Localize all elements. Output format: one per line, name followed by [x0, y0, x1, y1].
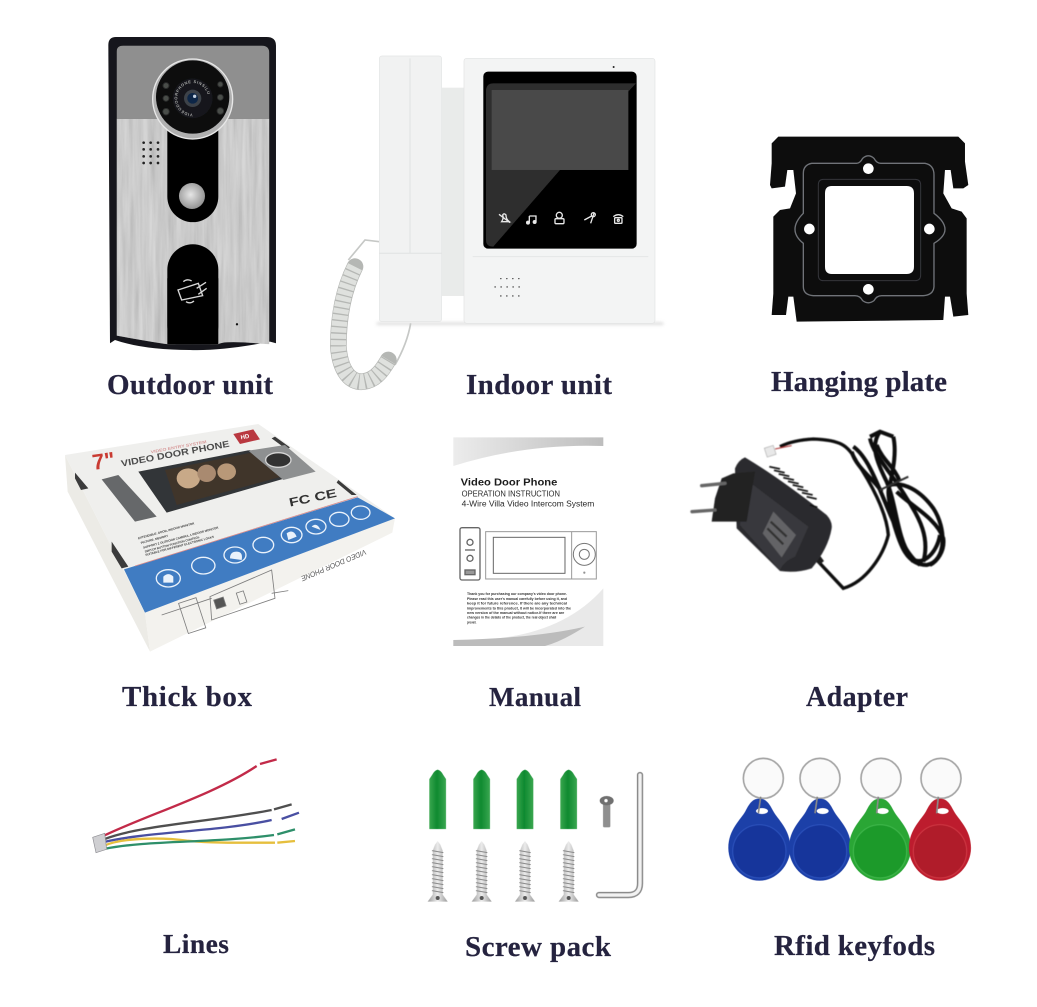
outdoor unit housing — [108, 37, 276, 350]
screen — [492, 90, 628, 170]
box top — [65, 424, 395, 613]
certification marks: FC CE — [288, 486, 338, 510]
label: adapter: Adapter — [806, 682, 908, 713]
box front — [145, 518, 395, 652]
blue fob 2 — [789, 799, 851, 881]
red wire tip — [775, 446, 792, 449]
infrared LEDs — [163, 82, 224, 115]
camera lens: VIDEODOORPHONE SINSILU — [174, 80, 210, 116]
manual system name: 4-Wire Villa Video Intercom System — [462, 499, 595, 508]
blue wire — [104, 813, 299, 842]
microphone dot — [613, 66, 615, 68]
HD badge — [233, 429, 260, 444]
panel: screw pack — [428, 770, 640, 902]
panel: hanging plate — [770, 137, 968, 322]
yellow wire — [104, 839, 295, 846]
handset — [379, 56, 442, 322]
adapter body — [735, 457, 832, 572]
feature list: SUPPORT 2 OUTDOOR CAMERA, 1 INDOOR MONITOR — [143, 525, 220, 550]
box title: VIDEO DOOR PHONE — [120, 439, 230, 469]
plug pins — [692, 483, 725, 512]
feature list: PICTURE: MEMORY — [140, 534, 169, 545]
panel: indoor unit — [338, 56, 663, 382]
icon: person — [555, 212, 564, 224]
inner ridge — [818, 179, 921, 281]
panel: adapter — [692, 432, 944, 588]
glass front — [483, 72, 637, 249]
cable tie — [880, 477, 908, 490]
green wire — [104, 829, 295, 849]
plug housing — [712, 472, 755, 522]
box left side — [65, 455, 150, 652]
green fob — [849, 799, 911, 881]
label: outdoor unit: Outdoor unit — [107, 369, 273, 401]
label: manual: Manual — [489, 682, 581, 712]
feature list — [138, 521, 220, 557]
upside-down product name: VIDEO DOOR PHONE — [300, 547, 368, 583]
icon: key — [584, 213, 595, 223]
monitor body — [464, 58, 655, 323]
manual body text: Please read this user's manual carefully before using it, and — [467, 597, 567, 601]
size mark: 7" — [91, 447, 116, 475]
wall anchors — [429, 770, 577, 829]
panel: manual — [453, 437, 603, 646]
top swoosh — [453, 437, 603, 466]
monitor side panel — [248, 445, 316, 480]
label: indoor unit: Indoor unit — [466, 369, 612, 401]
speaker holes — [142, 141, 159, 164]
connector — [93, 833, 107, 853]
key rings — [743, 758, 961, 798]
label: hanging plate: Hanging plate — [771, 366, 947, 398]
brushed metal faceplate — [113, 43, 273, 352]
touch icons — [499, 212, 623, 224]
lower panel seam — [473, 255, 648, 258]
icon: music — [527, 216, 536, 224]
strain relief — [804, 544, 824, 565]
feature list: EXTENDIBLE: DOOR, INDOOR MONITOR — [138, 521, 196, 540]
family photo — [165, 453, 282, 505]
call button — [179, 183, 205, 209]
manual body text: changes in the details of the product, the real object shall — [467, 616, 556, 620]
feature list: SWITCH BUTTON FUNCTION CONTROL — [144, 535, 200, 554]
glass reflection — [486, 83, 636, 247]
cable bundle — [852, 432, 944, 565]
panel: rfid keyfobs — [728, 758, 971, 881]
label: rfid keyfods: Rfid keyfods — [774, 930, 935, 962]
hex key — [599, 775, 640, 895]
camera ring — [153, 59, 233, 139]
long screws — [428, 841, 579, 902]
vents — [769, 467, 817, 507]
bottom swoosh — [453, 588, 603, 646]
wiring diagram — [162, 570, 288, 633]
adapter lit face — [740, 480, 808, 570]
manual body text: keep it for future reference. If there are any technical — [467, 602, 567, 606]
icon: mute bell — [499, 214, 510, 223]
icon: phone — [613, 215, 623, 223]
manual body text — [467, 592, 571, 624]
bottom band — [453, 627, 585, 646]
feature icons — [156, 506, 370, 587]
manual subtitle: OPERATION INSTRUCTION — [462, 489, 560, 498]
manual title: Video Door Phone — [461, 478, 558, 489]
red fob — [909, 799, 971, 881]
panel: thick box — [65, 424, 395, 652]
label: screw pack: Screw pack — [465, 931, 612, 963]
manual body text: new version of the manual without notice.If there are are — [467, 611, 564, 615]
handset cord — [338, 240, 411, 382]
plate silhouette — [770, 137, 968, 322]
manual body text: Thank you for purchasing our company's video door phone. — [467, 592, 567, 596]
manual page — [453, 437, 603, 646]
card reader icon — [178, 280, 207, 303]
speaker holes — [495, 279, 525, 296]
ring clips — [758, 797, 938, 813]
box subtitle: VIDEO ENTRY SYSTEM — [150, 439, 208, 454]
call button strip — [167, 125, 218, 222]
blue fob 1 — [728, 799, 790, 881]
outdoor unit picture — [102, 475, 157, 522]
status dot — [236, 323, 238, 325]
feature list: SUITABLE FOR DIFFERENT ELECTRONIC LOCKS — [145, 535, 214, 557]
red wire — [103, 759, 277, 836]
floor shadow — [377, 323, 663, 325]
monitor diagram — [486, 532, 596, 579]
door station diagram — [460, 528, 480, 580]
side notches — [75, 437, 357, 568]
manual body text: prevail. — [467, 620, 476, 624]
embossed ridge — [795, 156, 945, 303]
label: thick box: Thick box — [122, 681, 252, 713]
manual body text: improvements to this product, it will be incorporated into the — [467, 606, 571, 610]
panel: outdoor unit — [108, 37, 276, 350]
panel: lines — [93, 759, 299, 853]
black wire — [104, 804, 292, 839]
output cable — [780, 439, 888, 588]
wall bracket bridge — [441, 88, 466, 296]
small machine screw — [600, 796, 614, 827]
HD badge: HD — [240, 434, 251, 441]
camera face — [156, 60, 229, 134]
rating label — [763, 512, 796, 557]
blue band — [124, 497, 395, 613]
white connector — [764, 445, 776, 457]
monitor picture — [138, 450, 285, 513]
red accent line — [135, 497, 358, 566]
label: lines: Lines — [163, 928, 229, 959]
